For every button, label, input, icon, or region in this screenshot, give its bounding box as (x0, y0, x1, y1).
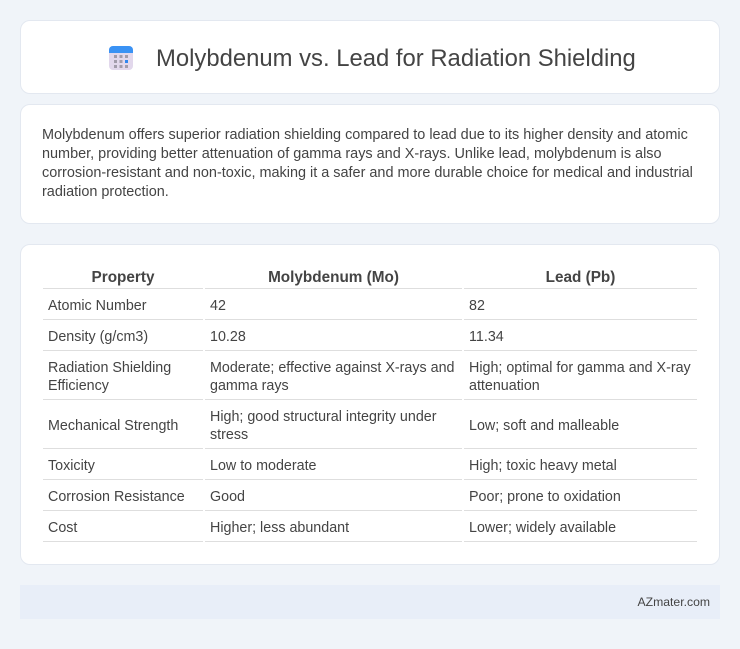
row: density: 11.34 (469, 329, 504, 345)
intro text: corrosion-resistant and non-toxic, making it a safer and more durable choice for medical and industrial (42, 165, 693, 181)
row: radiation shielding efficiency: High; optimal for gamma and X-ray (469, 360, 691, 376)
row: radiation shielding efficiency: gamma rays (210, 378, 289, 394)
row: atomic number: Atomic Number (48, 298, 147, 314)
row: mechanical strength (48, 409, 619, 443)
row: atomic number (48, 298, 485, 314)
row: density: Density (g/cm3) (48, 329, 148, 345)
row: density (48, 329, 504, 345)
intro text: Molybdenum offers superior radiation shielding compared to lead due to its higher density and atomic (42, 127, 688, 143)
table header: Molybdenum (Mo) (268, 269, 399, 286)
row: cost: Higher; less abundant (210, 520, 349, 536)
row: corrosion resistance: Poor; prone to oxidation (469, 489, 621, 505)
row: atomic number: 42 (210, 298, 226, 314)
intro text: radiation protection. (42, 184, 169, 200)
row: mechanical strength: Low; soft and malleable (469, 418, 619, 434)
row: radiation shielding efficiency (48, 360, 691, 394)
row: toxicity: Toxicity (48, 458, 95, 474)
table header (92, 269, 615, 286)
row: mechanical strength: stress (210, 427, 248, 443)
row: mechanical strength: Mechanical Strength (48, 418, 178, 434)
row: density: 10.28 (210, 329, 246, 345)
icon: calendar (109, 46, 133, 70)
row: radiation shielding efficiency: Moderate; effective against X-rays and (210, 360, 455, 376)
row: toxicity: High; toxic heavy metal (469, 458, 617, 474)
comparison table panel (20, 244, 720, 565)
header panel (20, 20, 720, 94)
comparison table (43, 269, 697, 542)
row: radiation shielding efficiency: Radiation Shielding (48, 360, 171, 376)
footer credit: AZmater.com (638, 595, 710, 609)
row: corrosion resistance: Corrosion Resistance (48, 489, 185, 505)
row: toxicity (48, 458, 617, 474)
row: toxicity: Low to moderate (210, 458, 316, 474)
footer bar (20, 585, 720, 619)
row: atomic number: 82 (469, 298, 485, 314)
intro panel (20, 104, 720, 224)
row: cost: Lower; widely available (469, 520, 616, 536)
row: radiation shielding efficiency: attenuation (469, 378, 540, 394)
title: Molybdenum vs. Lead for Radiation Shielding (156, 45, 636, 72)
row: radiation shielding efficiency: Efficiency (48, 378, 109, 394)
table header: Lead (Pb) (546, 269, 615, 286)
row: cost: Cost (48, 520, 77, 536)
table header: Property (92, 269, 154, 286)
row: cost (48, 520, 616, 536)
row: corrosion resistance (48, 489, 621, 505)
intro text: number, providing better attenuation of gamma rays and X-rays. Unlike lead, molybdenum is also (42, 146, 662, 162)
row: mechanical strength: High; good structural integrity under (210, 409, 436, 425)
intro text (42, 127, 693, 200)
row: corrosion resistance: Good (210, 489, 245, 505)
